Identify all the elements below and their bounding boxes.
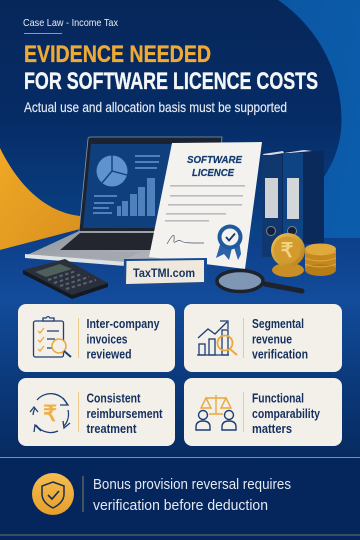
seal <box>216 224 242 260</box>
subtitle: Actual use and allocation basis must be supported <box>24 99 287 115</box>
laptop <box>25 137 222 266</box>
eyebrow label: Case Law - Income Tax <box>23 17 119 29</box>
calculator <box>23 259 108 299</box>
footer banner <box>0 457 360 540</box>
card text: Consistent <box>86 392 141 406</box>
card text <box>86 317 160 362</box>
card text: Inter-company <box>86 317 160 331</box>
footer text <box>93 477 291 514</box>
card text: revenue <box>252 332 292 346</box>
rupee coins: ₹ <box>281 240 294 262</box>
footer text: verification before deduction <box>93 498 268 514</box>
rupee coins <box>271 233 336 277</box>
document heading: LICENCE <box>192 167 235 179</box>
icon: scale and people <box>196 395 236 430</box>
card text <box>86 392 163 436</box>
binders <box>262 150 324 257</box>
card text: Functional <box>252 392 304 406</box>
icon: shield badge <box>32 473 74 515</box>
illustration: desk scene <box>23 137 336 299</box>
card text: treatment <box>86 422 137 436</box>
nameplate: TaxTMI.com <box>133 266 195 280</box>
card text: matters <box>252 422 292 436</box>
icon: bar chart with magnifier <box>197 321 237 355</box>
card text: comparability <box>252 407 320 421</box>
icon: rupee cycle <box>30 394 70 433</box>
title <box>24 41 318 95</box>
gold accent rule <box>24 33 62 34</box>
card text: reviewed <box>86 348 132 362</box>
card text <box>252 392 320 436</box>
card: invoices <box>18 304 175 372</box>
footer text: Bonus provision reversal requires <box>93 477 291 493</box>
card: reimbursement <box>18 378 175 446</box>
card text: invoices <box>86 332 128 346</box>
nameplate <box>123 258 207 288</box>
licence document <box>149 142 262 269</box>
icon: clipboard with magnifier <box>34 316 71 357</box>
magnifying glass <box>217 270 302 292</box>
card text <box>252 317 308 362</box>
document heading: SOFTWARE <box>187 154 243 166</box>
card: comparability <box>184 378 342 446</box>
title: EVIDENCE NEEDED <box>24 41 211 68</box>
card text: Segmental <box>252 317 304 331</box>
document heading <box>187 154 243 179</box>
card text: verification <box>252 348 308 362</box>
icon: rupee cycle: ₹ <box>43 401 57 426</box>
card: revenue <box>184 304 342 372</box>
card text: reimbursement <box>86 407 163 421</box>
